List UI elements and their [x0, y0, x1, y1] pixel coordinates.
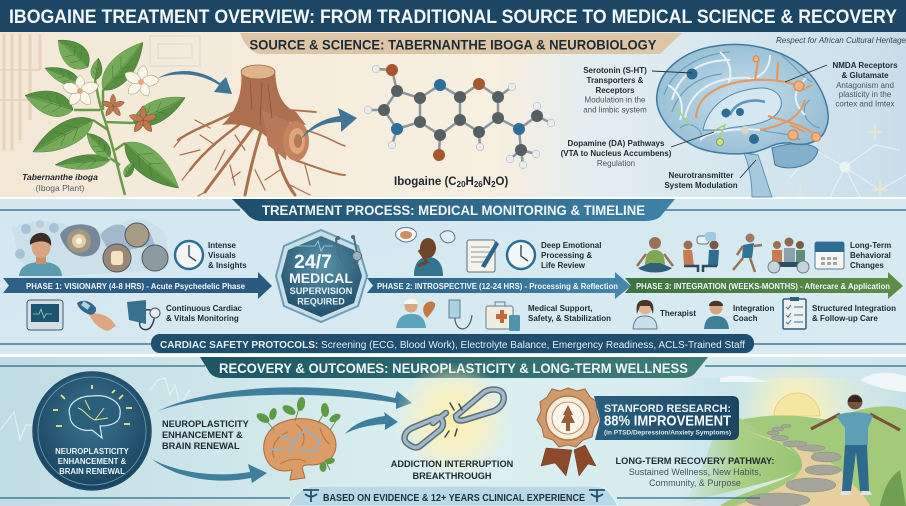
molecule label: H: [466, 176, 474, 188]
text: cardiac monitoring: [166, 304, 243, 323]
molecule label: 20: [457, 180, 466, 189]
label: neurotransmitter: [664, 171, 738, 190]
text: medical support: Medical Support,: [528, 304, 592, 313]
section heading: source and science: SOURCE & SCIENCE: TABERNANTHE IBOGA & NEUROBIOLOGY: [250, 36, 657, 52]
icon: broken chain: [405, 390, 504, 447]
section heading: recovery and outcomes: [200, 357, 708, 378]
badge: neuroplasticity circle: ENHANCEMENT &: [58, 457, 127, 466]
label: serotonin: [583, 66, 647, 114]
label: dopamine: (VTA to Nucleus Accumbens): [561, 149, 672, 158]
arrow: phase 3: [625, 272, 903, 299]
text: therapist: Therapist: [660, 309, 696, 318]
illustration: brain neurobiology: [652, 44, 828, 197]
section heading: treatment process: [232, 199, 675, 221]
figure: person with open arms: [811, 394, 900, 495]
molecule label: 26: [474, 180, 483, 189]
badge: neuroplasticity circle: BRAIN RENEWAL: [59, 467, 125, 476]
label: NMDA: Antagonism and: [836, 81, 894, 90]
text: recovery pathway: Community, & Purpose: [649, 478, 741, 488]
molecule: ibogaine structure: [364, 64, 555, 169]
molecule label: N: [483, 176, 491, 188]
arrow: root to molecule: [300, 108, 357, 140]
icon: clock: [175, 241, 203, 269]
text: emotional processing: Deep Emotional: [541, 241, 601, 250]
ecg line decoration: [0, 378, 190, 455]
callout: stanford research: [594, 396, 739, 440]
callout: cardiac safety protocols: CARDIAC SAFETY PROTOCOLS: Screening (ECG, Blood Work), Electrolyte Balance, Emergency Readiness, ACLS-Trained Staff: [160, 340, 745, 351]
text: medical support: Safety, & Stabilization: [528, 314, 611, 323]
arrow: phase 1: PHASE 1: VISIONARY (4-8 HRS) - Acute Psychedelic Phase: [26, 281, 245, 291]
text: emotional processing: Life Review: [541, 261, 586, 270]
icon: clipboard: [783, 297, 806, 329]
label: dopamine: Dopamine (DA) Pathways: [568, 139, 665, 148]
plant label: [22, 172, 98, 193]
label: NMDA: plasticity in the: [839, 90, 892, 99]
panel: recovery and outcomes: [0, 357, 906, 506]
panel: source and science: [0, 31, 906, 198]
footer: evidence note: BASED ON EVIDENCE & 12+ YEARS CLINICAL EXPERIENCE: [323, 493, 585, 504]
footer: evidence note: [288, 486, 618, 506]
text: behavioral changes: [850, 241, 891, 270]
neuron background: [700, 125, 906, 197]
icon: iboga root: [174, 65, 345, 196]
icon: calendar: [815, 242, 844, 269]
text: addiction interruption: BREAKTHROUGH: [412, 471, 492, 481]
illustration: visionary swirl: [12, 219, 170, 276]
badge: medical supervision: MEDICAL: [289, 270, 353, 286]
badge: medical supervision: SUPERVISION: [290, 286, 353, 296]
arrow: circle to chain: [158, 387, 412, 411]
text: emotional processing: [541, 241, 601, 270]
label: dopamine: Regulation: [597, 159, 635, 168]
icon: clock: [507, 241, 535, 269]
label: NMDA: cortex and Imtex: [835, 100, 895, 108]
text: recovery pathway: [616, 456, 774, 488]
text: medical support: [528, 304, 611, 323]
label: serotonin: Serotonin (S-HT): [583, 66, 647, 75]
badge: stanford seal: [537, 388, 599, 476]
label: NMDA: [832, 61, 898, 108]
text: intense visuals: Visuals: [208, 251, 236, 260]
arrow: phase 2: PHASE 2: INTROSPECTIVE (12-24 HRS) - Processing & Reflection: [377, 281, 618, 291]
icon: support group: [768, 238, 809, 273]
title bar: [0, 0, 906, 33]
icon: therapy conversation: [683, 232, 719, 272]
text: structured integration: [812, 304, 896, 323]
text: structured integration: & Follow-up Care: [812, 314, 878, 323]
text: behavioral changes: Long-Term: [850, 241, 891, 250]
label: NMDA: & Glutamate: [841, 71, 889, 80]
text: cardiac monitoring: & Vitals Monitoring: [166, 314, 239, 323]
section heading: recovery and outcomes: RECOVERY & OUTCOMES: NEUROPLASTICITY & LONG-TERM WELLNESS: [219, 361, 688, 376]
label: NMDA: NMDA Receptors: [832, 61, 898, 70]
arrow: phase 2: [367, 272, 631, 299]
icon: reflective person: [396, 228, 455, 276]
molecule label: [394, 176, 508, 189]
badge: neuroplasticity circle: NEUROPLASTICITY: [55, 447, 130, 456]
arrow: plant to root: [158, 71, 232, 94]
text: integration coach: Coach: [733, 314, 758, 323]
text: neuroplasticity: NEUROPLASTICITY: [162, 419, 249, 429]
molecule label: Ibogaine (C: [394, 176, 457, 188]
arrow: circle to brain: [152, 459, 267, 483]
label: serotonin: Modulation in the: [585, 96, 646, 104]
molecule label: O): [496, 176, 508, 188]
text: addiction interruption: ADDICTION INTERRUPTION: [391, 459, 514, 469]
badge: medical supervision: 24/7: [294, 251, 332, 273]
text: structured integration: Structured Integration: [812, 304, 896, 313]
text: integration coach: Integration: [733, 304, 774, 313]
callout: stanford research: STANFORD RESEARCH:: [604, 403, 731, 415]
landscape: recovery pathway: [680, 359, 906, 506]
arrow: phase 1: [3, 272, 272, 299]
callout: stanford research: 88% IMPROVEMENT: [604, 412, 731, 430]
text: intense visuals: [208, 241, 247, 270]
illustration: brain with leaves: [255, 396, 398, 480]
badge: medical supervision: REQUIRED: [297, 296, 345, 306]
icon: runner: [733, 234, 762, 272]
icon: therapist: [633, 300, 657, 329]
text: addiction interruption: [391, 459, 514, 481]
plant label: (Iboga Plant): [36, 183, 85, 193]
panel: treatment process: [0, 199, 906, 354]
text: cardiac monitoring: Continuous Cardiac: [166, 304, 243, 313]
text: intense visuals: Intense: [208, 241, 237, 250]
label: serotonin: Receptors: [595, 86, 635, 95]
text: neuroplasticity: [162, 419, 249, 451]
text: neuroplasticity: BRAIN RENEWAL: [162, 441, 240, 451]
section heading: treatment process: TREATMENT PROCESS: MEDICAL MONITORING & TIMELINE: [262, 203, 645, 218]
icon: first aid kit: [486, 302, 520, 331]
icon: meditating person: [637, 237, 673, 272]
icon: blood pressure cuff: [127, 300, 160, 330]
callout: stanford research: (in PTSD/Depression/Anxiety Symptoms): [604, 430, 731, 436]
note: cultural heritage: Respect for African Cultural Heritage: [776, 36, 906, 45]
text: behavioral changes: Behavioral: [850, 251, 891, 260]
text: neuroplasticity: ENHANCEMENT &: [162, 430, 243, 440]
icon: iboga plant: [22, 31, 190, 198]
text: recovery pathway: LONG-TERM RECOVERY PATHWAY:: [616, 456, 774, 466]
text: intense visuals: & Insights: [208, 261, 247, 270]
plant label: Tabernanthe iboga: [22, 172, 98, 182]
text: behavioral changes: Changes: [850, 261, 884, 270]
label: neurotransmitter: Neurotransmitter: [669, 171, 733, 180]
callout: cardiac safety protocols: [151, 334, 754, 353]
label: serotonin: Transporters &: [587, 76, 644, 85]
label: neurotransmitter: System Modulation: [664, 181, 738, 190]
molecule label: 2: [491, 180, 496, 189]
icon: integration coach: [704, 301, 729, 329]
label: dopamine: [561, 139, 672, 168]
text: integration coach: [733, 304, 774, 323]
badge: medical supervision: [276, 230, 367, 322]
icon: journal: [467, 240, 499, 272]
icon: heart monitor: [27, 300, 63, 330]
badge: neuroplasticity circle: [33, 372, 151, 490]
icon: nurse with heart: [396, 299, 435, 328]
text: emotional processing: Processing &: [541, 251, 592, 260]
icon: pulse oximeter on finger: [77, 301, 116, 331]
label: serotonin: and limbic system: [583, 106, 647, 114]
icon: iv drip: [449, 300, 472, 329]
glow behind chain: [395, 362, 511, 478]
text: recovery pathway: Sustained Wellness, New Habits,: [629, 467, 761, 477]
